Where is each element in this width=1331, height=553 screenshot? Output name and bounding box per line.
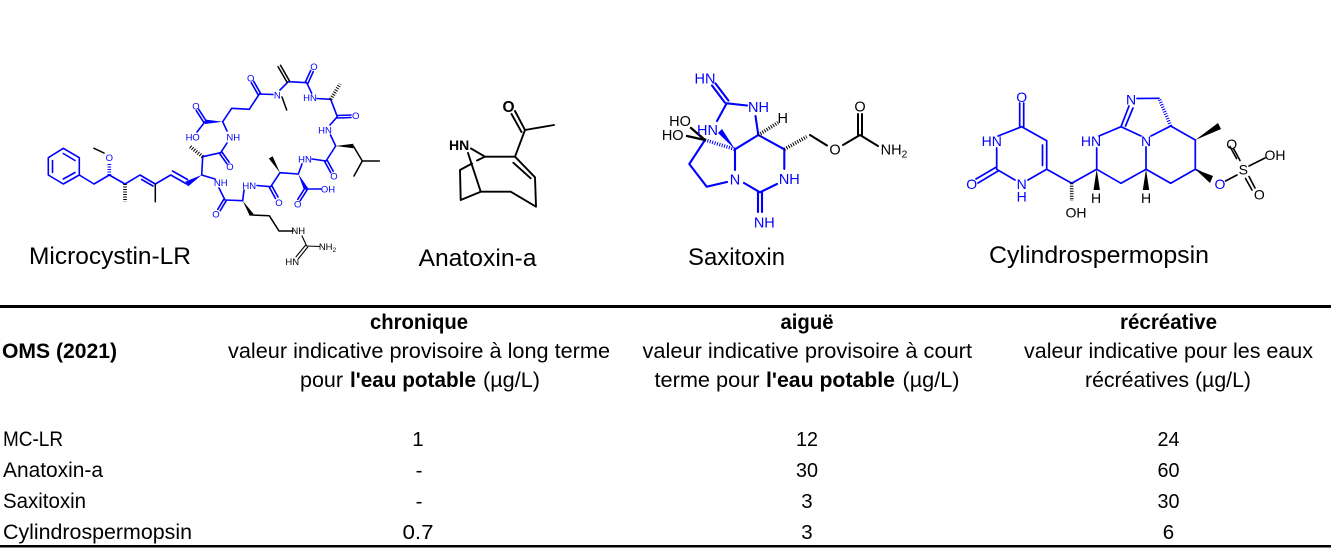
atom labels of Cylindrospermopsin: N bbox=[1126, 92, 1136, 108]
atom labels of Anatoxin-a: O bbox=[502, 99, 515, 116]
column header: aiguë: (µg/L) bbox=[902, 369, 960, 392]
atom labels of Saxitoxin: HO bbox=[662, 128, 684, 144]
atom labels of Microcystin-LR: NH bbox=[291, 226, 305, 237]
atom labels of Cylindrospermopsin: HN bbox=[1081, 133, 1101, 149]
molecule: Saxitoxin bbox=[662, 72, 908, 232]
column header: chronique: pour bbox=[300, 369, 343, 392]
row: Cylindrospermopsin: 0.7 bbox=[402, 521, 434, 544]
atom labels of Microcystin-LR: NH bbox=[319, 242, 333, 253]
atom labels of Microcystin-LR: HN bbox=[242, 181, 256, 192]
row header: OMS (2021): OMS (2021) bbox=[2, 340, 117, 363]
molecule names: Saxitoxin bbox=[688, 244, 785, 271]
atom labels of Saxitoxin: H bbox=[777, 111, 788, 127]
row: MC-LR: 12 bbox=[796, 428, 818, 451]
atom labels of Saxitoxin: HN bbox=[695, 72, 715, 88]
column header: récréative: récréative bbox=[1120, 311, 1217, 334]
atom labels of Cylindrospermopsin: O bbox=[1226, 136, 1237, 152]
row: Anatoxin-a: 30 bbox=[796, 459, 818, 482]
atom labels of Cylindrospermopsin: O bbox=[1215, 176, 1226, 192]
atom labels of Saxitoxin: 2 bbox=[902, 148, 908, 160]
row: Cylindrospermopsin: 6 bbox=[1163, 521, 1174, 544]
atom labels of Microcystin-LR bbox=[106, 62, 359, 268]
atom labels of Microcystin-LR: O bbox=[275, 198, 283, 209]
atom labels of Saxitoxin: NH bbox=[779, 172, 800, 188]
atom labels of Cylindrospermopsin: O bbox=[1016, 89, 1027, 105]
row: Cylindrospermopsin: Cylindrospermopsin bbox=[3, 521, 192, 544]
column header: chronique: (µg/L) bbox=[483, 369, 540, 392]
atom labels of Cylindrospermopsin: H bbox=[1091, 190, 1101, 206]
atom labels of Microcystin-LR: N bbox=[274, 90, 281, 102]
blue bonds of Saxitoxin bbox=[689, 84, 784, 212]
bonds of Anatoxin-a bbox=[460, 111, 554, 207]
column header: chronique: l'eau potable bbox=[350, 369, 476, 392]
atom labels of Anatoxin-a bbox=[449, 99, 515, 153]
atom labels of Microcystin-LR: O bbox=[226, 162, 234, 173]
column header: chronique: chronique bbox=[370, 311, 468, 334]
atom labels of Microcystin-LR: O bbox=[247, 74, 254, 84]
molecule: Cylindrospermopsin bbox=[966, 89, 1286, 220]
atom labels of Cylindrospermopsin: O bbox=[1254, 186, 1265, 202]
atom labels of Microcystin-LR: HN bbox=[303, 93, 317, 104]
column header: aiguë: terme pour bbox=[654, 369, 760, 392]
atom labels of Microcystin-LR: 2 bbox=[333, 247, 337, 254]
atom labels of Microcystin-LR: OH bbox=[321, 184, 335, 196]
column header: récréative bbox=[1024, 311, 1314, 392]
row: MC-LR: 1 bbox=[412, 428, 424, 451]
atom labels of Saxitoxin: NH bbox=[748, 100, 769, 116]
atom labels of Microcystin-LR: NH bbox=[214, 178, 228, 189]
atom labels of Microcystin-LR: HN bbox=[285, 257, 299, 268]
atom labels of Microcystin-LR: NH bbox=[226, 132, 240, 144]
row: Anatoxin-a: Anatoxin-a bbox=[3, 459, 103, 482]
row: Cylindrospermopsin: 3 bbox=[801, 521, 813, 544]
column header: aiguë: valeur indicative provisoire à court bbox=[642, 340, 972, 363]
black bonds of Cylindrospermopsin bbox=[1226, 146, 1265, 190]
atom labels of Saxitoxin: HN bbox=[697, 123, 718, 139]
atom labels of Saxitoxin bbox=[662, 72, 908, 232]
column header: aiguë bbox=[642, 311, 972, 392]
table top rule bbox=[0, 305, 1331, 308]
molecule names bbox=[29, 242, 1209, 272]
column header: chronique bbox=[228, 311, 610, 392]
blue bonds of Cylindrospermopsin bbox=[976, 98, 1210, 183]
atom labels of Cylindrospermopsin bbox=[966, 89, 1286, 220]
atom labels of Cylindrospermopsin: H bbox=[1141, 190, 1151, 206]
row: MC-LR bbox=[3, 428, 1180, 451]
blue bonds of Microcystin-LR bbox=[48, 70, 351, 211]
molecule: Microcystin-LR bbox=[48, 62, 379, 268]
atom labels of Saxitoxin: O bbox=[854, 100, 866, 116]
column header: récréative: valeur indicative pour les eaux bbox=[1024, 340, 1314, 363]
atom labels of Microcystin-LR: O bbox=[212, 210, 220, 220]
molecule names: Cylindrospermopsin bbox=[989, 242, 1209, 269]
atom labels of Microcystin-LR: HN bbox=[318, 126, 332, 136]
atom labels of Cylindrospermopsin: HN bbox=[982, 133, 1002, 149]
table: valeurs indicatives OMS bbox=[0, 305, 1331, 548]
atom labels of Cylindrospermopsin: H bbox=[1017, 188, 1027, 204]
stereo bonds of Saxitoxin bbox=[687, 123, 807, 149]
atom labels of Microcystin-LR: O bbox=[310, 62, 318, 73]
atom labels of Cylindrospermopsin: OH bbox=[1066, 204, 1086, 220]
row: Cylindrospermopsin bbox=[3, 521, 1174, 544]
row: Saxitoxin bbox=[3, 490, 1180, 513]
table bottom rule bbox=[0, 545, 1331, 548]
stereo wedges of Microcystin-LR bbox=[109, 84, 353, 216]
atom labels of Microcystin-LR: HO bbox=[186, 132, 200, 144]
stereo bonds of Cylindrospermopsin bbox=[1072, 98, 1221, 201]
atom labels of Cylindrospermopsin: O bbox=[966, 176, 977, 192]
row: Anatoxin-a: 60 bbox=[1158, 459, 1180, 482]
atom labels of Saxitoxin: N bbox=[730, 172, 740, 188]
molecule names: Microcystin-LR bbox=[29, 243, 191, 270]
row: Saxitoxin: Saxitoxin bbox=[3, 490, 86, 513]
atom labels of Anatoxin-a: HN bbox=[449, 137, 469, 153]
atom labels of Microcystin-LR: O bbox=[352, 111, 359, 122]
row: Anatoxin-a: - bbox=[416, 459, 422, 482]
atom labels of Cylindrospermopsin: S bbox=[1239, 162, 1248, 178]
atom labels of Microcystin-LR: HN bbox=[298, 154, 312, 166]
row: Saxitoxin: - bbox=[416, 490, 422, 513]
black bonds of Microcystin-LR bbox=[94, 65, 379, 231]
row: Saxitoxin: 30 bbox=[1158, 490, 1180, 513]
molecule names: Anatoxin-a bbox=[418, 245, 537, 272]
atom labels of Microcystin-LR: O bbox=[330, 172, 338, 182]
black bonds of Saxitoxin bbox=[810, 114, 878, 146]
atom labels of Microcystin-LR: O bbox=[106, 153, 113, 164]
atom labels of Microcystin-LR: O bbox=[294, 200, 301, 210]
column header: aiguë: l'eau potable bbox=[766, 369, 895, 392]
atom labels of Cylindrospermopsin: N bbox=[1141, 133, 1151, 149]
atom labels of Cylindrospermopsin: N bbox=[1017, 176, 1027, 192]
atom labels of Cylindrospermopsin: OH bbox=[1264, 147, 1286, 163]
row: Saxitoxin: 3 bbox=[801, 490, 813, 513]
atom labels of Saxitoxin: NH bbox=[754, 216, 775, 232]
atom labels of Saxitoxin: NH bbox=[881, 142, 902, 158]
column header: chronique: valeur indicative provisoire à long terme bbox=[228, 340, 610, 363]
atom labels of Microcystin-LR: O bbox=[192, 102, 200, 112]
row: MC-LR: 24 bbox=[1158, 428, 1180, 451]
column header: récréative: récréatives (µg/L) bbox=[1085, 369, 1251, 392]
atom labels of Saxitoxin: O bbox=[829, 142, 841, 158]
row: MC-LR: MC-LR bbox=[3, 428, 63, 451]
atom labels of Saxitoxin: HO bbox=[669, 114, 691, 130]
column header: aiguë: aiguë bbox=[780, 311, 834, 334]
row: Anatoxin-a bbox=[3, 459, 1180, 482]
molecule: Anatoxin-a bbox=[449, 99, 554, 207]
